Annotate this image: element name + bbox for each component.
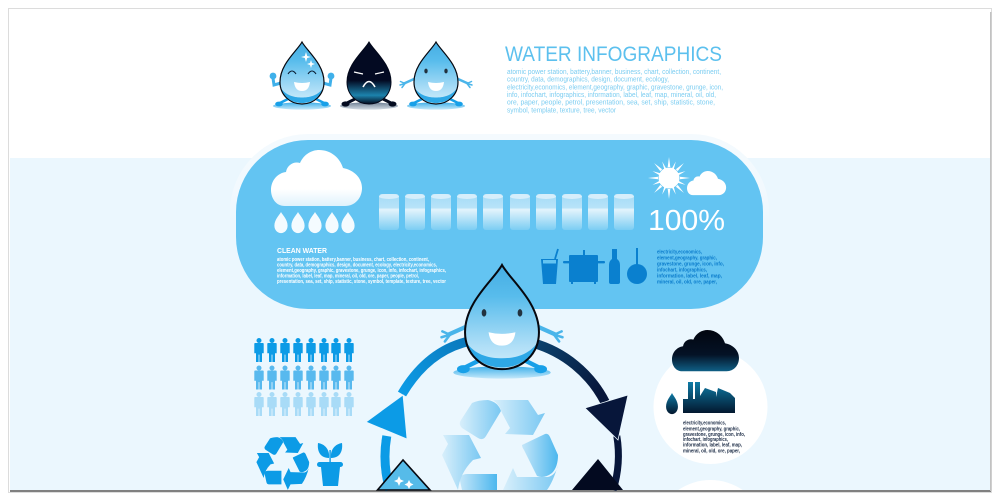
character: main drop sitting on cycle <box>442 265 562 379</box>
arrowhead: right <box>585 395 628 440</box>
character: smiling drop <box>400 42 472 110</box>
icon: dark cloud <box>672 330 739 371</box>
white circle: cropped lower <box>678 480 743 490</box>
icon: sun and cloud <box>648 157 726 199</box>
icon: potted plant <box>317 443 343 486</box>
keyword text block: symbol, template, texture, tree, vector <box>507 108 617 114</box>
cycle arrows <box>366 341 628 490</box>
clean water heading: CLEAN WATER <box>277 246 328 255</box>
pollution text <box>683 420 746 454</box>
glasses of water row <box>379 194 634 230</box>
arrowhead: left <box>366 395 407 439</box>
icons: kitchen items <box>541 248 647 284</box>
clean water text: element,geography, graphic, gravestone, grunge, icon, info, infochart, infographics, <box>277 268 447 274</box>
pollution text: gravestone, grunge, icon, info, <box>683 432 746 438</box>
clean water text <box>277 257 447 285</box>
keyword text block: electricity,economics, element,geography, graphic, gravestone, grunge, icon, <box>507 84 723 92</box>
keyword text block: info, infochart, infographics, information, label, leaf, map, mineral, oil, old, <box>507 92 716 99</box>
icon: factory <box>683 382 735 413</box>
title: WATER INFOGRAPHICS <box>505 43 722 66</box>
100% label: 100% <box>648 205 725 237</box>
pollution text: information, label, leaf, map, <box>683 442 743 448</box>
kitchen text: element,geography, graphic, <box>657 256 718 262</box>
clean water text: atomic power station, battery,banner, business, chart, collection, continent, <box>277 257 430 263</box>
kitchen text: information, label, leaf, map, <box>657 274 723 280</box>
kitchen text: mineral, oil, old, ore, paper, <box>657 280 718 286</box>
character: happy drop with sparkles <box>270 42 334 110</box>
icon: small recycle symbol <box>256 437 309 490</box>
bottom drop: clean <box>378 460 430 490</box>
panel: clean water <box>230 134 769 315</box>
white circle: pollution <box>654 330 768 464</box>
pollution text: element,geography, graphic, <box>683 426 741 432</box>
character: sad polluted drop <box>340 42 398 110</box>
bottom drop: polluted <box>572 459 623 490</box>
pollution text: infochart, infographics, <box>683 437 728 443</box>
large recycle symbol <box>442 400 558 490</box>
keyword text block: country, data, demographics, design, document, ecology, <box>507 76 669 84</box>
kitchen text: infochart, infographics, <box>657 268 708 274</box>
clean water text: country, data, demographics, design, document, ecology, electricity,economics, <box>277 262 438 268</box>
icon: rain cloud <box>271 150 362 233</box>
keyword text block: atomic power station, battery,banner, business, chart, collection, continent, <box>507 69 721 76</box>
keyword text block <box>507 69 723 114</box>
people chart <box>254 338 354 416</box>
kitchen text: gravestone, grunge, icon, info, <box>657 262 725 268</box>
clean water text: presentation, sea, set, ship, statistic, stone, symbol, template, texture, tree, vector <box>277 279 446 285</box>
pollution text: mineral, oil, old, ore, paper, <box>683 448 741 454</box>
pale blue lower background <box>10 158 990 490</box>
pollution text: electricity,economics, <box>683 420 727 426</box>
icon: dark drop <box>666 393 678 414</box>
kitchen text: electricity,economics, <box>657 250 703 256</box>
kitchen text <box>657 250 725 286</box>
clean water text: information, label, leaf, map, mineral, oil, old, ore, paper, people, petrol, <box>277 274 420 280</box>
keyword text block: ore, paper, people, petrol, presentation, sea, set, ship, statistic, stone, <box>507 100 715 106</box>
